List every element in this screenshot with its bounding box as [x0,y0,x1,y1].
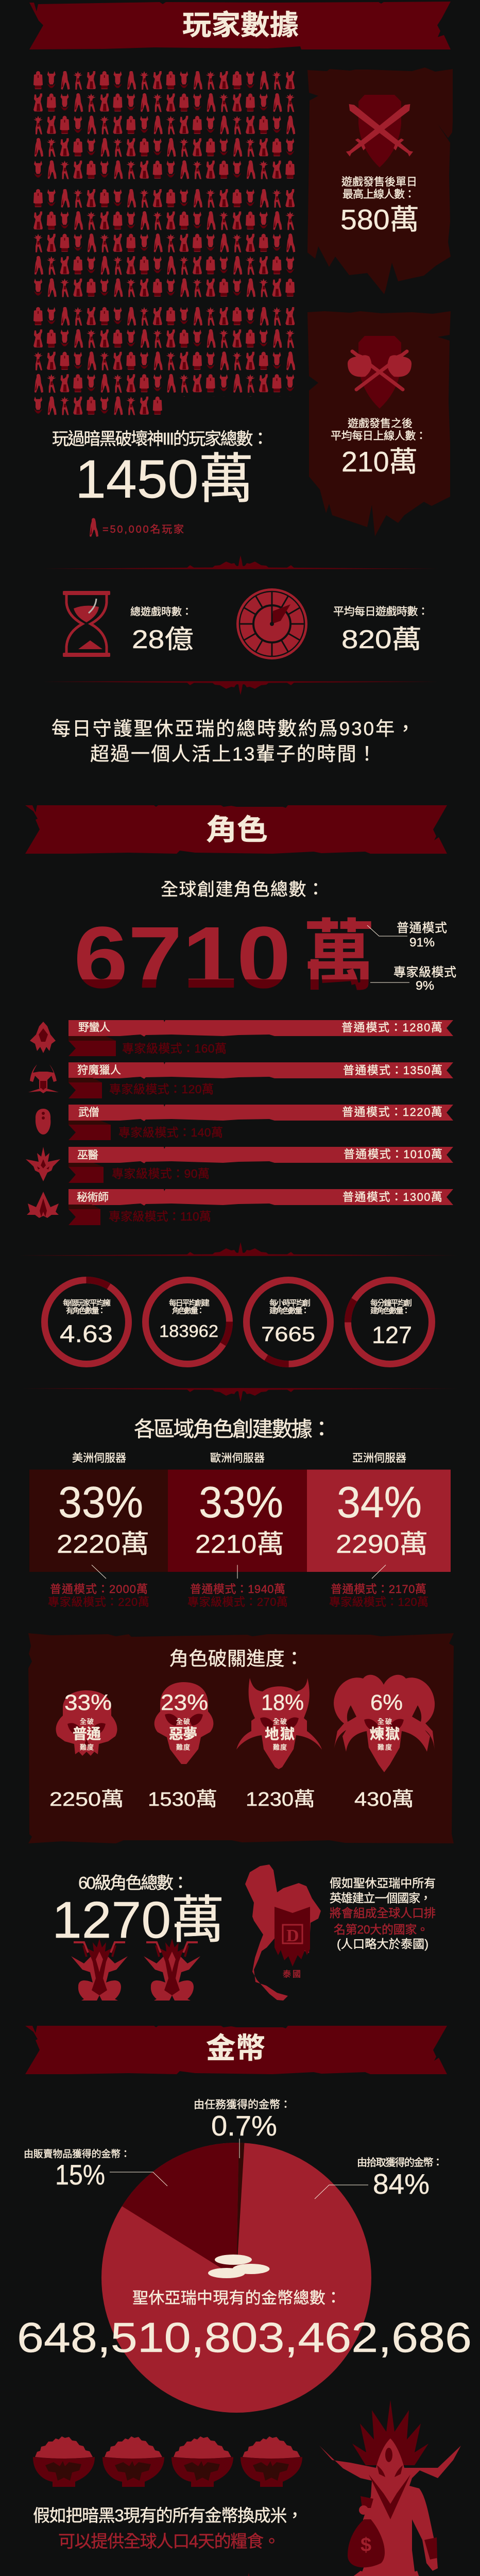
skull: nightmare difficulty: 難度 [176,1743,190,1751]
skull: nightmare difficulty [155,1682,213,1764]
ring stat: characters per day: 每日平均創建 [169,1299,210,1308]
class row: demon hunter: 普通模式：1350萬 [343,1064,442,1077]
callout: quest gold: 由任務獲得的金幣： [194,2099,291,2111]
icon: wizard [27,1192,59,1218]
callout: normal mode [367,921,447,950]
region: Asia: 2290萬 [336,1530,428,1558]
number: 67.1 million characters with normal and expert split [74,909,375,1007]
total play time [130,606,194,654]
legend: one figure equals 50,000 players: =50,000名玩家 [102,523,184,535]
average daily play time: 820萬 [341,625,422,654]
quote: sanctuary hours: 超過一個人活上13輩子的時間！ [90,743,376,765]
icons: rice bowls [33,2436,302,2487]
skull: hell difficulty: 地獄 [265,1726,295,1742]
total play time: 28億 [132,625,194,654]
panel: average daily online players: 210萬 [341,446,418,478]
region: Americas [29,1452,168,1608]
class row: witch doctor: 普通模式：1010萬 [344,1148,442,1161]
region: Europe: 2210萬 [195,1530,284,1558]
skull: inferno difficulty: 6% [370,1690,403,1715]
class row: barbarian: 專家級模式：160萬 [122,1042,227,1055]
icon: gold coins [208,2255,270,2278]
callout: normal mode: 91% [409,936,435,950]
ring stat: characters per hour: 每小時平均創 [269,1299,311,1308]
ring stat: characters per player: 有角色數量： [66,1307,106,1315]
average daily play time [333,606,428,654]
class row: witch doctor: 專家級模式：90萬 [112,1167,210,1180]
total gold number: 648,510,803,462,686 [17,2314,472,2361]
class row: witch doctor [26,1147,453,1183]
region: Europe: 歐洲伺服器 [210,1452,265,1464]
icon: shield with crossed swords [344,95,415,167]
section banner: gold: 金幣 [206,2032,265,2064]
icon: demon hunter [28,1064,59,1093]
illustration: demon with money bag [319,2400,461,2576]
callout: expert mode: 9% [416,979,434,993]
region: Europe: 普通模式：1940萬 [190,1583,285,1596]
panel: average daily online players: 平均每日上線人數： [331,430,426,442]
text: country comparison [330,1876,436,1951]
region: Asia: 亞洲伺服器 [352,1452,406,1464]
ring stat: characters per minute: 每分鐘平均創 [370,1299,412,1308]
skull: nightmare difficulty: 23% [161,1690,208,1715]
panel: completion progress [28,1633,454,1843]
text: country comparison: (人口略大於泰國) [337,1937,428,1951]
icons: two demons [71,1939,200,2001]
icon: witch doctor [26,1147,60,1181]
class row: monk: 普通模式：1220萬 [342,1106,442,1118]
callout: vendor gold [24,2148,167,2191]
quote: sanctuary hours [52,718,415,765]
region: Americas: 2220萬 [57,1530,149,1558]
region: Europe: 33% [199,1478,283,1527]
region: Asia: 34% [337,1478,422,1527]
region: Americas: 33% [58,1478,143,1527]
class row: barbarian [30,1020,453,1056]
callout: quest gold [194,2099,291,2158]
level 60 characters stat: 60級角色總數： [78,1873,189,1892]
class row: wizard: 專家級模式：110萬 [109,1210,211,1223]
ring stat: characters per player: 每個玩家平均擁 [63,1299,111,1308]
text: gold as rice [33,2506,303,2551]
skull: normal difficulty: 33% [64,1690,112,1715]
region: Americas: 美洲伺服器 [72,1452,126,1464]
skull: normal difficulty: 難度 [80,1743,94,1751]
ring stat: characters per minute: 127 [372,1321,412,1348]
heading: regional data: 各區域角色創建數據： [134,1417,332,1441]
skull: hell difficulty: 全破 [273,1718,287,1725]
class row: witch doctor: 巫醫 [77,1149,98,1161]
class row: wizard: 秘術師 [77,1192,109,1204]
ring stat: characters per minute [348,1280,432,1364]
callout: looted gold [315,2157,443,2200]
callout: looted gold: 84% [373,2168,430,2200]
divider [181,2573,317,2576]
ring stat: characters per hour [246,1280,331,1364]
illustration: demon with money bag: $ [361,2534,371,2556]
pie chart: gold sources [101,2143,371,2413]
section banner: gold [25,2026,447,2074]
total gold heading: 聖休亞瑞中現有的金幣總數： [132,2289,341,2307]
region: Americas: 普通模式：2000萬 [50,1583,148,1596]
ring stat: characters per hour: 建角色數量： [269,1307,309,1315]
panel: peak online players: 遊戲發售後單日 [341,176,417,188]
callout: vendor gold: 15% [55,2159,105,2191]
pictogram: total players as figures [33,71,299,419]
ring stat: characters per day: 角色數量： [172,1307,204,1315]
total players number: 1450萬 [75,449,254,510]
legend: one figure equals 50,000 players [90,518,184,537]
region: Asia: 普通模式：2170萬 [331,1583,426,1596]
class row: demon hunter: 專家級模式：120萬 [109,1082,214,1096]
text: country comparison: 將會組成全球人口排 [330,1906,436,1920]
callout: expert mode: 專家級模式 [393,965,456,979]
class row: wizard: 普通模式：1300萬 [342,1191,442,1204]
class row: monk: 專家級模式：140萬 [118,1126,223,1139]
panel: completion progress: 角色破關進度： [169,1648,304,1669]
divider [19,1242,461,1256]
callout: expert mode [370,965,456,993]
panel: peak online players: 580萬 [340,204,419,235]
map: Thailand with banner: D [286,1926,299,1945]
class row: barbarian: 野蠻人 [78,1022,110,1033]
skull: nightmare difficulty: 惡夢 [169,1726,197,1742]
skull: hell difficulty: 難度 [273,1743,287,1751]
class row: monk: 武僧 [78,1107,99,1118]
panel: peak online players: 最高上線人數： [342,189,415,200]
panel: average daily online players [307,311,451,536]
region: Americas: 專家級模式：220萬 [48,1596,149,1608]
skull: normal difficulty: 普通 [73,1726,101,1742]
class row: demon hunter [28,1062,453,1098]
callout: quest gold: 0.7% [211,2110,277,2142]
ring stat: characters per day: 183962 [159,1321,218,1341]
icon: barbarian [30,1022,56,1053]
region: Europe: 專家級模式：270萬 [187,1596,288,1608]
class row: barbarian: 普通模式：1280萬 [341,1021,442,1034]
ring stat: characters per day [145,1280,230,1364]
text: country comparison: 名第20大的國家。 [334,1923,428,1936]
class row: wizard [27,1189,453,1225]
skull: inferno difficulty: 全破 [378,1718,392,1725]
ring stat: characters per hour: 7665 [261,1323,315,1346]
heading: total characters: 全球創建角色總數： [161,880,324,900]
skull: inferno difficulty [334,1675,435,1772]
skull: hell difficulty [236,1678,322,1769]
icon: monk [36,1109,50,1134]
callout: looted gold: 由拾取獲得的金幣： [357,2157,443,2168]
section banner: characters [25,805,447,854]
total players heading: 玩過暗黑破壞神III的玩家總數： [52,429,269,448]
text: country comparison: 英雄建立一個國家， [330,1891,432,1905]
total play time: 總遊戲時數： [130,606,192,618]
class row: demon hunter: 狩魔獵人 [77,1064,121,1076]
text: gold as rice: 可以提供全球人口4天的糧食。 [58,2532,280,2551]
divider [22,1388,459,1402]
text: country comparison: 假如聖休亞瑞中所有 [330,1876,436,1890]
region: Europe [168,1452,307,1608]
icon: shield with crossed axes [348,336,412,409]
section banner: player data [29,2,451,49]
quote: sanctuary hours: 每日守護聖休亞瑞的總時數約爲930年， [52,718,415,739]
divider [43,555,438,569]
average daily play time: 平均每日遊戲時數： [333,606,428,618]
map: Thailand with banner [245,1865,321,2001]
region: Asia [307,1452,451,1608]
ring stat: characters per player [44,1280,129,1364]
panel: completion progress: 430萬 [354,1789,414,1810]
skull: hell difficulty: 18% [261,1690,304,1715]
panel: average daily online players: 遊戲發售之後 [348,418,413,430]
skull: inferno difficulty: 煉獄 [370,1726,400,1742]
number: 67.1 million characters with normal and expert split: 萬 [303,913,375,999]
icon: clock [236,588,307,659]
text: gold as rice: 假如把暗黑3現有的所有金幣換成米， [33,2506,303,2525]
icon: hourglass [63,591,110,657]
skull: normal difficulty: 全破 [80,1718,94,1725]
level 60 characters stat: 1270萬 [52,1891,225,1949]
skull: inferno difficulty: 難度 [378,1743,392,1751]
section banner: characters: 角色 [206,814,268,846]
ring stat: characters per player: 4.63 [60,1320,113,1347]
skull: normal difficulty [56,1690,117,1756]
panel: completion progress: 1230萬 [246,1789,315,1810]
panel: completion progress: 2250萬 [49,1789,124,1810]
callout: vendor gold: 由販賣物品獲得的金幣： [24,2148,130,2160]
number: 67.1 million characters with normal and expert split: 6710 [74,909,291,1007]
map: Thailand with banner: 泰國 [283,1970,301,1979]
divider [43,681,438,695]
region: Asia: 專家級模式：120萬 [329,1596,428,1608]
panel: peak online players [307,67,453,294]
ring stat: characters per minute: 建角色數量： [370,1307,410,1315]
skull: nightmare difficulty: 全破 [176,1718,190,1725]
callout: normal mode: 普通模式 [397,921,447,935]
panel: completion progress: 1530萬 [148,1789,217,1810]
section banner: player data: 玩家數據 [182,10,299,41]
class row: monk [36,1105,453,1140]
